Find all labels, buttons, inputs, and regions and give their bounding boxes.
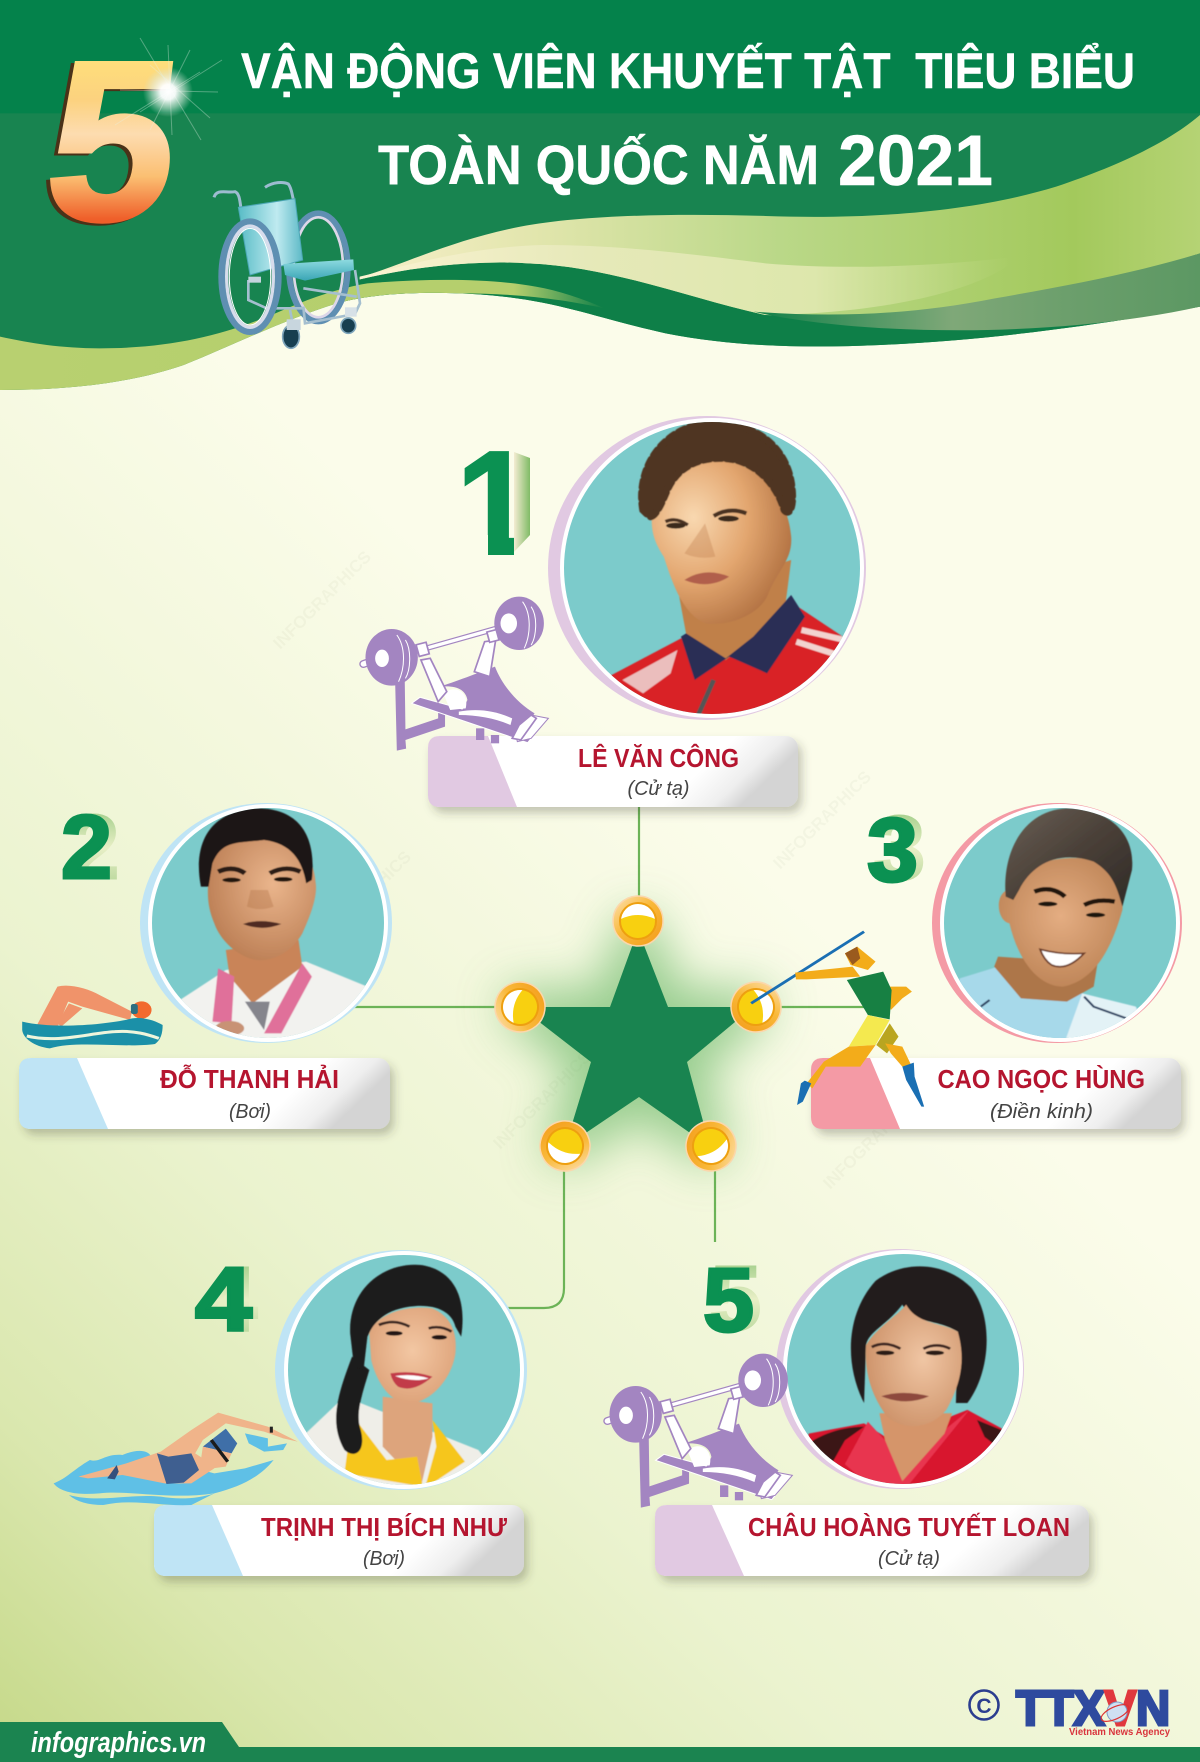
copyright mark: C xyxy=(976,1695,992,1718)
watermarks: INFOGRAPHICS xyxy=(769,767,875,873)
name label 4 xyxy=(154,1505,524,1576)
coins xyxy=(489,896,787,1180)
big number 5: 5 xyxy=(35,16,192,268)
name label 1: (Cử tạ) xyxy=(628,778,690,800)
panel: athlete 2 xyxy=(19,798,392,1129)
portrait 2 xyxy=(140,803,392,1043)
name label 4: TRỊNH THỊ BÍCH NHƯ xyxy=(261,1512,507,1542)
number 5: 5 xyxy=(710,1249,761,1349)
name label 3: CAO NGỌC HÙNG xyxy=(938,1064,1145,1094)
number 4: 4 xyxy=(201,1250,257,1350)
watermarks: INFOGRAPHICS xyxy=(269,547,375,653)
portrait 4 xyxy=(275,1250,527,1493)
star glow xyxy=(520,930,753,1147)
portrait 5 xyxy=(776,1249,1024,1491)
name label 2: ĐỖ THANH HẢI xyxy=(160,1064,339,1094)
name label 1 xyxy=(428,736,798,807)
number 2: 2 xyxy=(61,798,112,898)
name label 1: LÊ VĂN CÔNG xyxy=(578,743,739,773)
title: 2021 xyxy=(838,122,993,201)
name label 3 xyxy=(811,1058,1181,1129)
panel: athlete 5 xyxy=(607,1249,1089,1576)
number 1: 1 xyxy=(456,421,534,586)
icon: swimmer 4 xyxy=(54,1413,298,1505)
star xyxy=(520,930,753,1147)
sparkle xyxy=(115,38,222,140)
number 3: 3 xyxy=(874,799,925,899)
watermarks xyxy=(269,547,925,1193)
title: TOÀN QUỐC NĂM xyxy=(378,133,819,196)
panel: athlete 3 xyxy=(751,799,1182,1129)
number 4: 4 xyxy=(195,1250,252,1350)
icon: weightlifter xyxy=(363,597,548,751)
icon: swimmer 2 xyxy=(22,986,163,1048)
copyright mark xyxy=(970,1690,998,1720)
watermarks: INFOGRAPHICS xyxy=(579,557,685,663)
connector lines xyxy=(354,807,875,1308)
watermarks: INFOGRAPHICS xyxy=(489,1047,595,1153)
name label 5 xyxy=(655,1505,1089,1576)
panel: athlete 4 xyxy=(54,1250,527,1576)
watermarks: INFOGRAPHICS xyxy=(819,1087,925,1193)
number 1 xyxy=(464,451,530,555)
number 5: 5 xyxy=(703,1251,754,1351)
footer site name: infographics.vn xyxy=(31,1727,206,1759)
watermarks: INFOGRAPHICS xyxy=(309,847,415,953)
name label 2 xyxy=(19,1058,390,1129)
name label 5: CHÂU HOÀNG TUYẾT LOAN xyxy=(748,1512,1070,1542)
footer bar xyxy=(0,1722,1200,1762)
logo: TTXVN: TTXVN xyxy=(1016,1682,1170,1736)
name label 3: (Điền kinh) xyxy=(990,1101,1093,1123)
name label 2: (Bơi) xyxy=(229,1101,271,1123)
icon: weightlifter 5 xyxy=(607,1354,792,1508)
name label 5: (Cử tạ) xyxy=(878,1548,940,1570)
name label 4: (Bơi) xyxy=(363,1548,405,1570)
number 3: 3 xyxy=(867,801,918,901)
portrait 1 xyxy=(548,416,867,730)
title xyxy=(241,42,1135,201)
panel: athlete 1 xyxy=(363,416,867,807)
portrait 3 xyxy=(932,803,1182,1047)
icon: wheelchair xyxy=(214,183,360,348)
big number 5: 5 xyxy=(31,18,188,270)
number 2: 2 xyxy=(68,798,119,898)
header band with waves xyxy=(0,0,1200,390)
icon: javelin athlete xyxy=(751,932,924,1107)
logo: TTXVN: Vietnam News Agency xyxy=(1069,1726,1170,1738)
